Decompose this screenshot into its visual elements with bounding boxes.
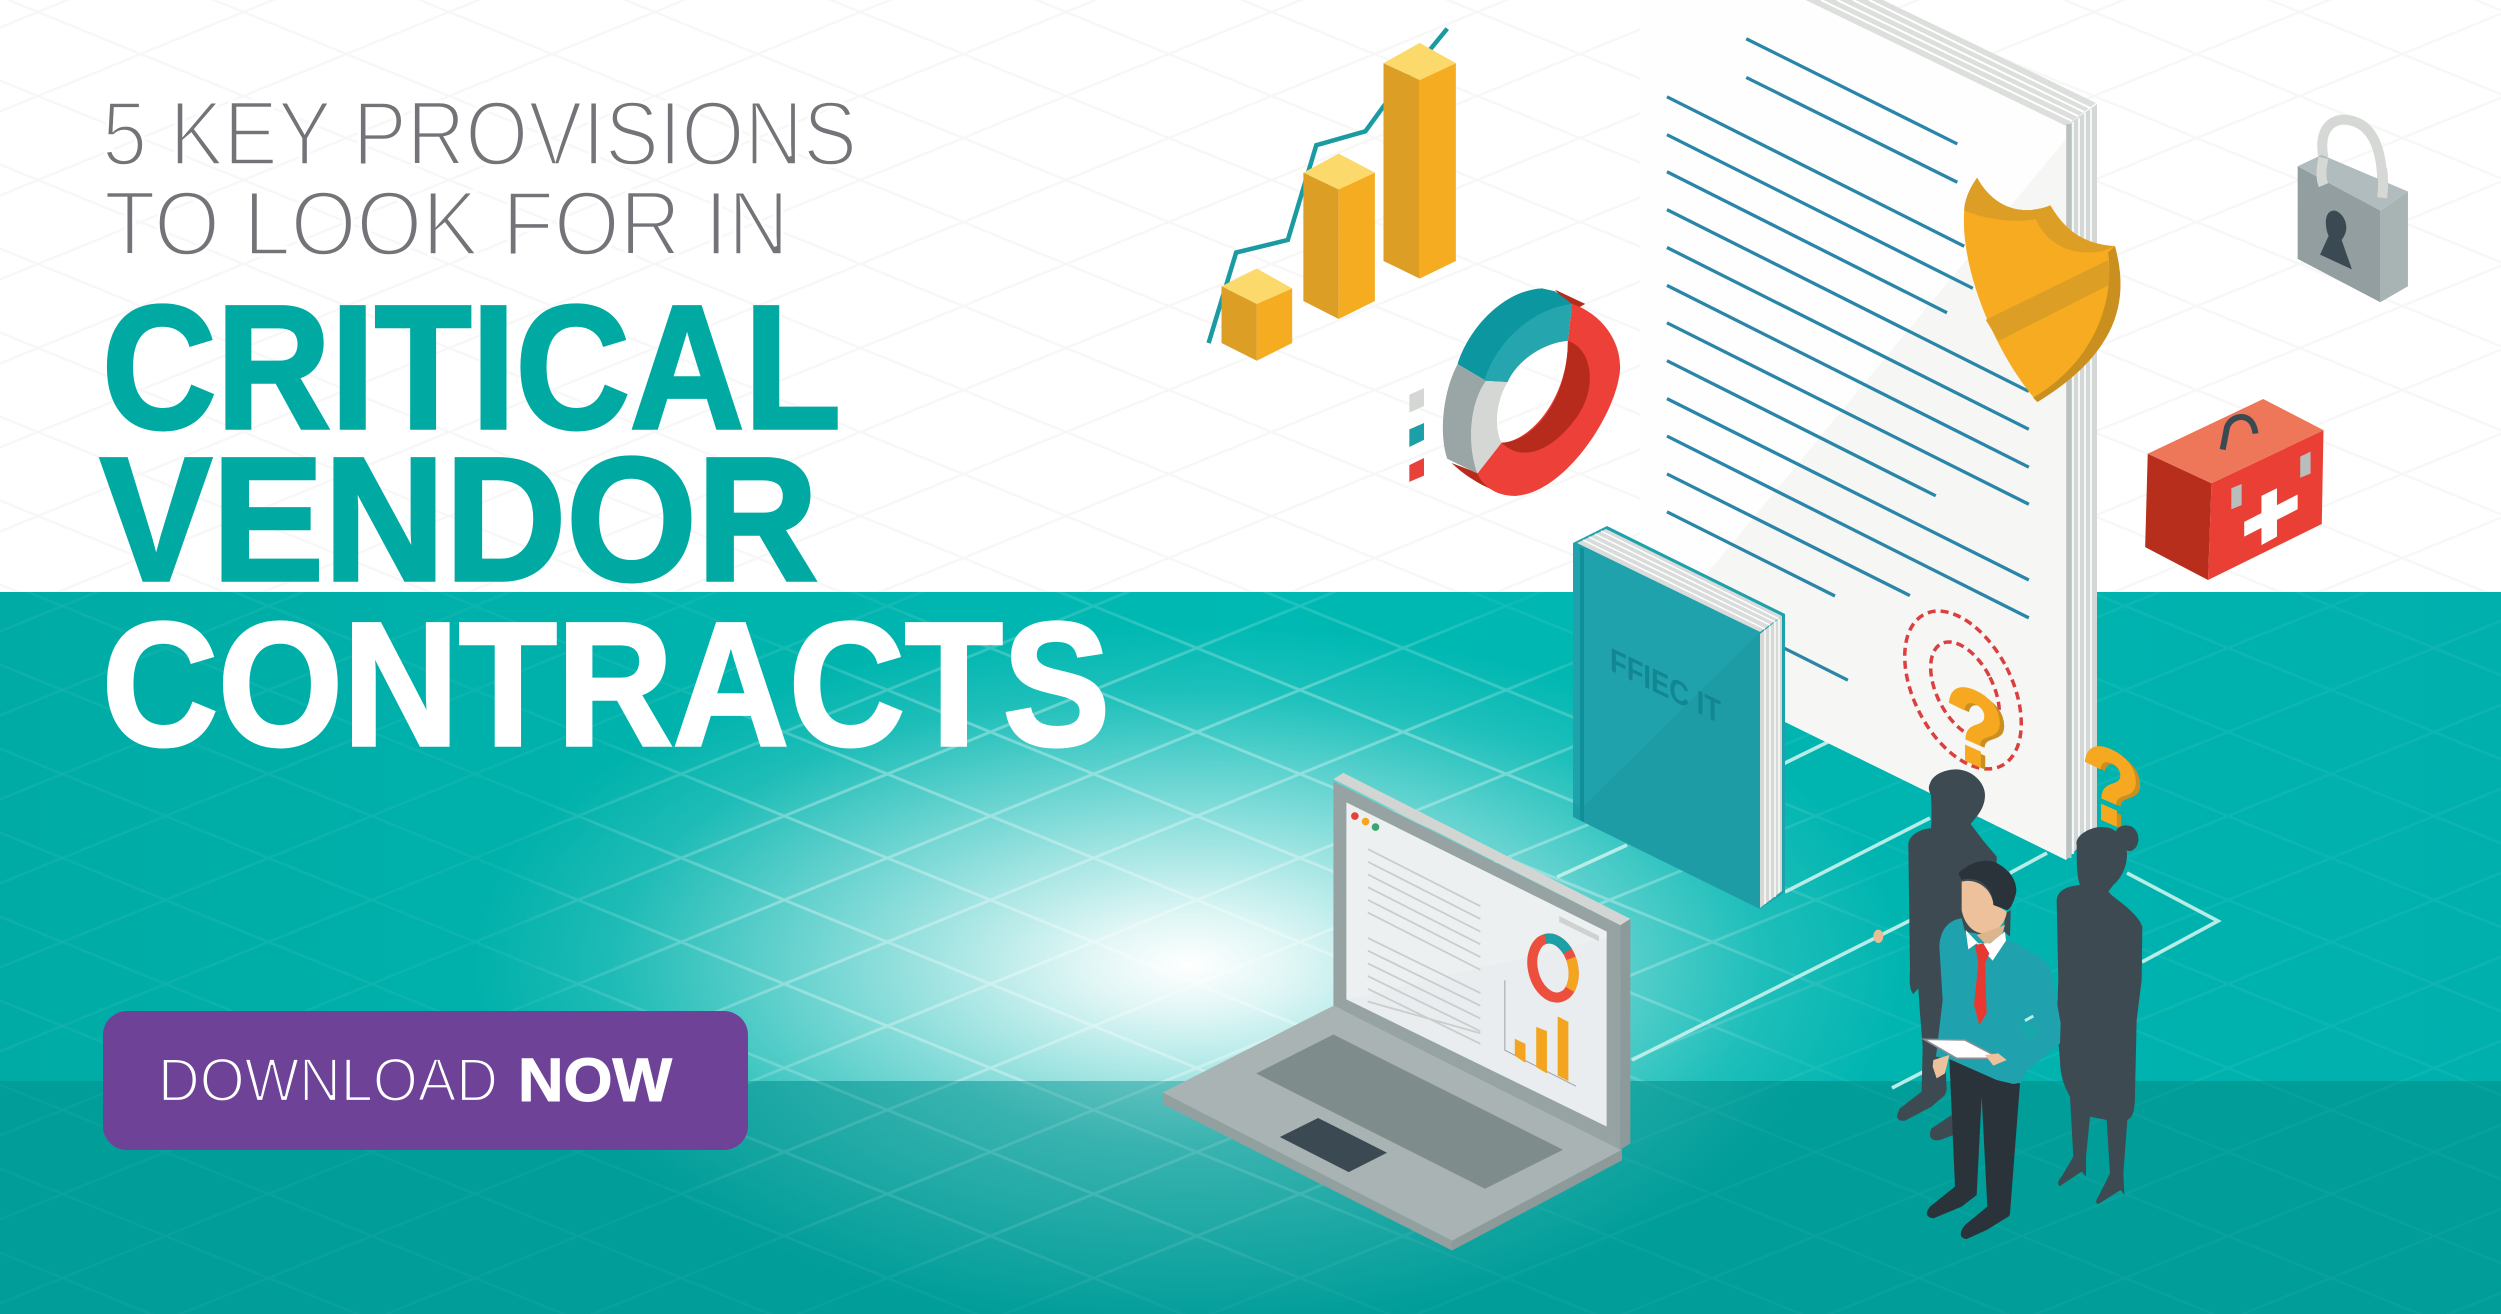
icon: question mark above woman: ?: [2082, 717, 2140, 859]
button: download now: [103, 1011, 748, 1150]
document right page edges: [2066, 104, 2097, 860]
book title: FFIEC IT: [1610, 641, 1721, 732]
icon: question mark above woman: ?: [2087, 721, 2146, 862]
title: critical vendor contracts: [100, 270, 1110, 783]
laptop base: [1163, 1006, 1622, 1251]
laptop keyboard: [1256, 1035, 1563, 1189]
back man hand: [1873, 930, 1883, 943]
title: intro lines: 5 KEY PROVISIONS: [102, 83, 857, 185]
donut legend: [1409, 388, 1424, 482]
title: intro lines: [102, 83, 857, 275]
red dashed seal: [1881, 592, 2045, 788]
book: FFIEC IT: [1573, 526, 1785, 909]
book cover: [1573, 543, 1760, 909]
icon: question mark on document: ?: [1951, 662, 2010, 803]
document text lines: [1667, 39, 2029, 680]
floor outline lines: [1557, 740, 2218, 1088]
laptop display: [1346, 802, 1607, 1126]
donut ring: [1443, 288, 1620, 496]
laptop screen frame: [1333, 773, 1630, 1150]
laptop trackpad: [1280, 1118, 1387, 1172]
background: white upper area: [0, 0, 2501, 592]
button: download now: DOWNLOAD: [158, 1046, 498, 1114]
bar 3: [1383, 43, 1456, 279]
document page face: [1640, 0, 2066, 860]
bar 2: [1303, 154, 1375, 319]
book back edge: [1573, 526, 1785, 909]
document: stacked contract: [1640, 0, 2097, 860]
background: teal floor: [0, 1081, 2501, 1314]
laptop screen bar chart: [1505, 980, 1576, 1086]
book right pages: [1760, 616, 1782, 908]
laptop screen donut: [1526, 934, 1580, 1002]
icon: padlock: [2298, 120, 2408, 302]
title: critical vendor contracts: CONTRACTS: [102, 587, 1110, 783]
icon: first aid kit: [2145, 399, 2323, 580]
document top page edges: [1805, 0, 2096, 126]
bar 1: [1222, 269, 1292, 361]
button: download now: NOW: [518, 1046, 672, 1114]
front man: [1924, 861, 2061, 1239]
book top pages: [1577, 529, 1782, 632]
trend line: [1209, 29, 1447, 343]
title: critical vendor contracts: CRITICAL: [102, 270, 841, 466]
background: teal wall with glow: [0, 592, 2501, 1081]
title: intro lines: TO LOOK FOR IN: [104, 173, 789, 275]
woman silhouette: [2057, 825, 2142, 1204]
back man silhouette: [1897, 769, 1997, 1140]
icon: question mark on document: ?: [1946, 658, 2004, 800]
people group: [1873, 769, 2142, 1239]
title: critical vendor contracts: VENDOR: [100, 422, 818, 618]
shield: [1964, 178, 2120, 402]
laptop: [1163, 773, 1630, 1251]
chart: rising bars with trend line: [1209, 29, 1456, 361]
chart: 3D donut with legend: [1409, 288, 1620, 496]
